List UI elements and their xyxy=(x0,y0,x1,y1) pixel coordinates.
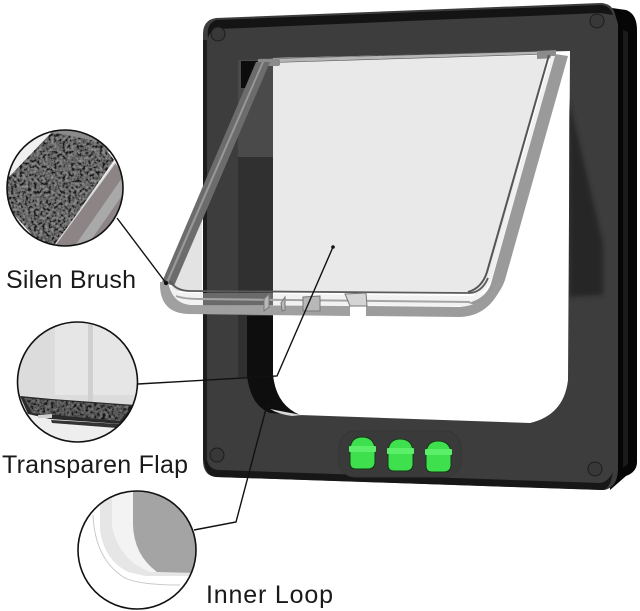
detail circle: brush xyxy=(8,130,122,246)
switch 3 xyxy=(425,441,452,472)
right arm white stripe xyxy=(474,56,555,296)
leader line xyxy=(138,247,333,384)
bottom edge shadow xyxy=(204,460,613,490)
right wall shadow xyxy=(569,100,603,297)
leader dot xyxy=(265,403,269,407)
flap band over frame xyxy=(203,293,273,305)
callout: transparent flap xyxy=(2,245,335,479)
screws xyxy=(210,14,604,476)
clips xyxy=(264,293,367,311)
hinge bar xyxy=(258,51,552,63)
right wall shadow shape xyxy=(569,100,603,297)
label: Silen Brush xyxy=(6,266,136,294)
loop fine outline xyxy=(93,515,180,585)
flap pane xyxy=(273,55,547,293)
screw bottom left xyxy=(210,448,224,462)
label: Transparen Flap xyxy=(2,451,188,479)
seal band xyxy=(20,396,135,424)
clip 2 xyxy=(281,297,285,311)
flap outer rim right xyxy=(366,283,503,317)
switch 1 xyxy=(349,437,376,469)
loop background xyxy=(76,490,198,610)
brush background xyxy=(9,132,118,234)
seal lower bar xyxy=(51,420,120,428)
lower inner recess xyxy=(247,316,300,415)
flap lighter panel xyxy=(55,320,140,395)
dark corner at flap hinge xyxy=(241,61,258,88)
opening left wall upper xyxy=(238,60,273,157)
leader line xyxy=(117,218,166,283)
transparent flap xyxy=(160,50,568,317)
leader dot xyxy=(331,245,335,249)
screw bottom right xyxy=(588,462,602,476)
switch 3 body xyxy=(426,441,451,472)
switch 2 body xyxy=(388,439,413,471)
switch 1 body xyxy=(350,437,375,469)
leader line xyxy=(194,405,267,530)
opening left wall xyxy=(238,157,273,377)
circle outline xyxy=(18,322,138,442)
clip 3 xyxy=(303,296,320,311)
right arm xyxy=(468,54,568,306)
flap bottom gray line xyxy=(176,296,470,302)
top edge shadow xyxy=(208,5,613,38)
back housing highlight strip xyxy=(623,30,628,468)
back housing xyxy=(610,8,637,490)
loop opening xyxy=(133,490,198,573)
detail circle: loop xyxy=(92,492,196,586)
brush fibres base xyxy=(6,132,114,244)
left arm xyxy=(162,62,270,286)
front frame xyxy=(203,3,618,490)
flap lower white xyxy=(28,414,117,442)
right arm dark lines xyxy=(468,55,549,292)
flap background xyxy=(18,328,136,413)
flap lower white band xyxy=(168,282,503,306)
brush top strip xyxy=(54,130,110,152)
flap vertical stripe xyxy=(88,324,93,402)
screw top right xyxy=(590,14,604,28)
loop inner band xyxy=(112,492,156,572)
right hinge xyxy=(537,50,556,59)
switch 3 tab xyxy=(425,449,452,455)
brush light line xyxy=(55,163,115,245)
circle outline xyxy=(7,130,123,246)
loop outer band xyxy=(100,498,190,576)
callout: silen brush xyxy=(5,128,168,294)
cat door product xyxy=(160,3,637,490)
left arm band xyxy=(162,62,270,286)
switch 1 tab xyxy=(349,446,376,452)
left arm stripe xyxy=(166,62,264,283)
seal texture xyxy=(24,398,132,421)
flap over frame xyxy=(172,218,202,291)
flap outer rim xyxy=(160,282,350,316)
left hinge xyxy=(258,59,280,66)
screw top left xyxy=(211,27,225,41)
right arm outer band xyxy=(468,54,568,306)
switch 2 tab xyxy=(387,448,414,454)
switch recess xyxy=(339,431,461,477)
locking switches xyxy=(339,431,461,477)
left edge shadow xyxy=(203,40,207,460)
brush rail highlight xyxy=(76,179,122,244)
clip 1 xyxy=(264,294,269,311)
brush fibres texture xyxy=(6,132,114,244)
flap bottom dark line xyxy=(170,278,488,293)
circle outline xyxy=(78,491,196,609)
clip 4 xyxy=(345,293,367,306)
detail circle: flap xyxy=(15,320,140,445)
seal highlight xyxy=(38,414,52,418)
callout: inner loop xyxy=(76,403,333,610)
leader dot xyxy=(164,281,168,285)
switch 2 xyxy=(387,439,414,471)
label: Inner Loop xyxy=(206,581,333,609)
inner loop sliver xyxy=(270,409,302,416)
brush rail xyxy=(56,163,122,246)
